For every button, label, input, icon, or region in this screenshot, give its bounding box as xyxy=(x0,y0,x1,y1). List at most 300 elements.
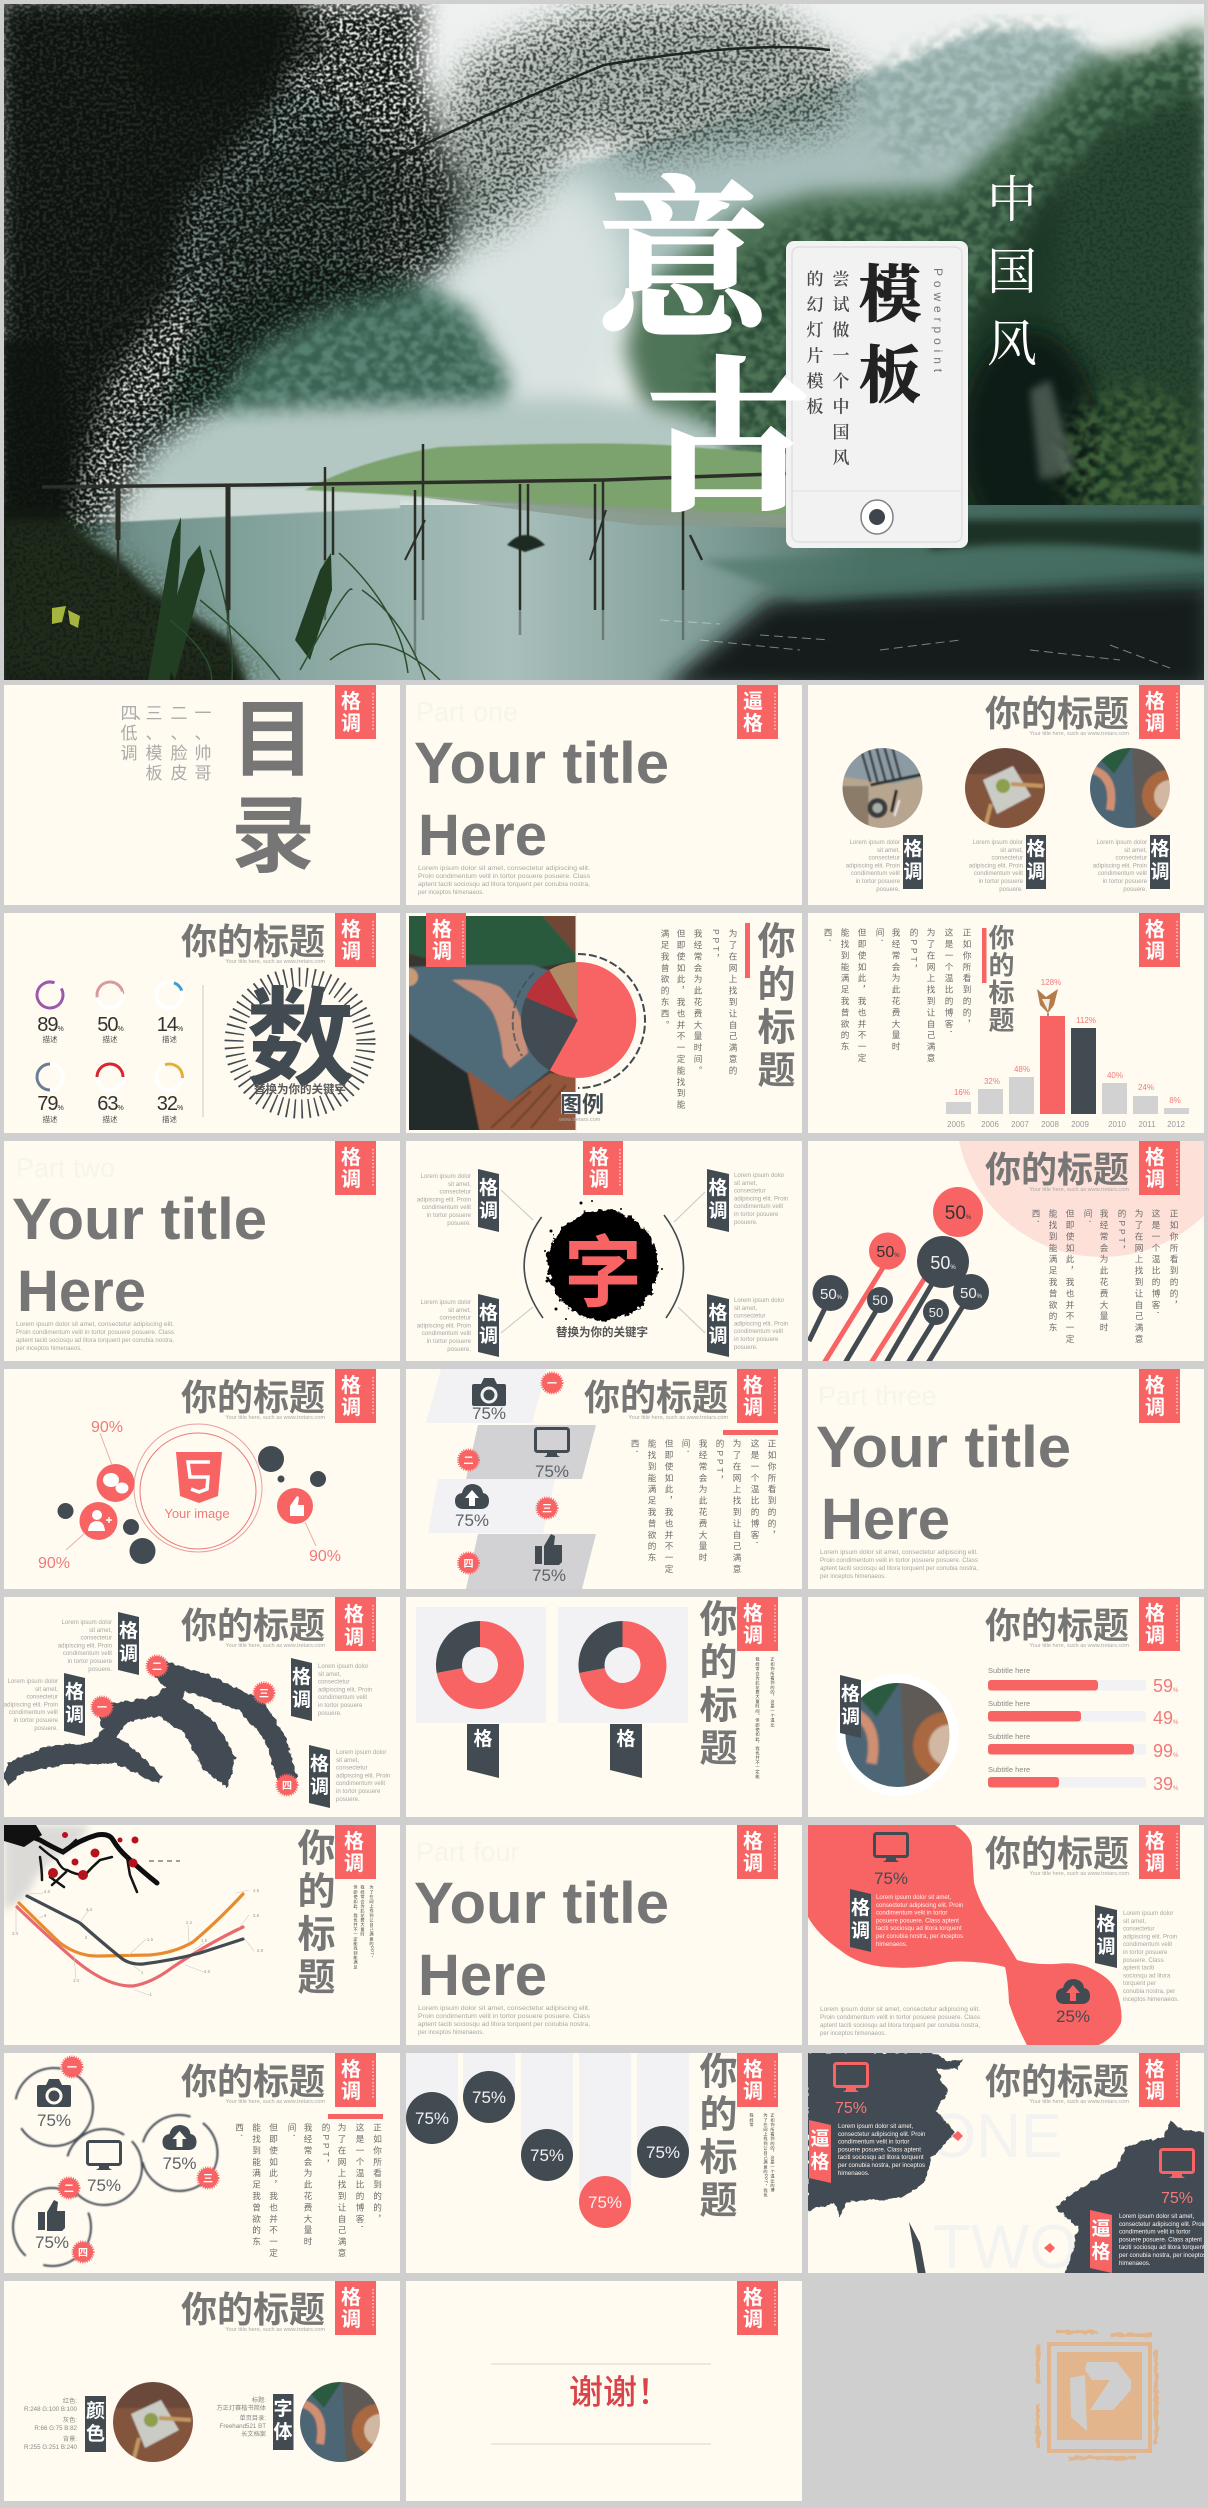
chart value labels: 4 xyxy=(44,1913,47,1918)
ring stat 50% xyxy=(95,980,125,1044)
text top left: in tortor posuere xyxy=(427,1212,472,1219)
text on ink lower: Lorem ipsum dolor sit amet, xyxy=(1119,2213,1194,2220)
colour notes xyxy=(24,2397,78,2451)
ribbon tag: 格 xyxy=(341,1146,361,1169)
ribbon tag: 格 xyxy=(743,2286,763,2309)
text on blob: taciti sociosqu ad litora torquent xyxy=(876,1925,962,1932)
ribbon tag: 格 xyxy=(743,1602,763,1625)
ribbon tag: 调 xyxy=(432,940,452,963)
font notes: 方正灯赛楷书简体 xyxy=(216,2404,267,2412)
donut tag 1 xyxy=(467,1724,499,1778)
text 1: condimentum velit xyxy=(63,1650,112,1657)
text 3: in tortor posuere xyxy=(318,1702,363,1709)
title: Your title here, such as www.tretars.com xyxy=(225,2099,325,2105)
vertical body text: 西' xyxy=(1031,1209,1041,1225)
text on ink lower: condimentum velit in tortor xyxy=(1119,2229,1190,2236)
bar chart: 8% xyxy=(1169,1096,1181,1105)
tiny vertical text xyxy=(749,2112,776,2198)
bar chart: 128% xyxy=(1041,978,1061,987)
vertical body text: 为了在网上找到让自己满意 xyxy=(337,2122,347,2260)
text on blob: per conubia nostra, per inceptos xyxy=(876,1933,963,1940)
percentage labels: 75% xyxy=(472,1404,506,1423)
circular photo xyxy=(836,1674,981,1796)
plum branch illustration xyxy=(4,1825,180,1910)
column chart: 75% xyxy=(646,2143,680,2162)
title: Your title here, such as www.tretars.com xyxy=(1029,2099,1129,2105)
panel: hero cover slide xyxy=(0,0,1208,690)
panel: four bands slide xyxy=(406,1369,802,1589)
contents list: 、 xyxy=(170,724,188,743)
text 3: posuere. xyxy=(318,1710,342,1717)
ribbon tag: 调 xyxy=(344,1626,364,1649)
ribbon tag: 格 xyxy=(1145,690,1165,713)
vertical body text xyxy=(630,1438,777,1576)
percentage labels: 75% xyxy=(37,2111,71,2130)
tag 3: 格 xyxy=(1150,838,1170,860)
text block 2: Lorem ipsum dolor xyxy=(973,839,1023,846)
body text: Lorem ipsum dolor sit amet, consectetur adipiscing elit. xyxy=(418,2005,590,2012)
tiny vertical text: 我经常 xyxy=(749,2112,754,2128)
ring stat 89%: 89% xyxy=(37,1014,64,1036)
body text: Proin condimentum velit in tortor posuere posuere. Class xyxy=(820,1557,978,1564)
ribbon tag: 调 xyxy=(1145,712,1165,735)
tag 1: 调 xyxy=(903,861,923,883)
body text: Proin condimentum velit in tortor posuere posuere. Class xyxy=(418,873,590,880)
text right: sit amet, xyxy=(1123,1918,1146,1925)
hero photo: misty river landscape xyxy=(0,0,1208,690)
text top right: sit amet, xyxy=(734,1180,757,1187)
text on ink lower: taciti sociosqu ad litora torquent xyxy=(1119,2244,1205,2251)
progress rows xyxy=(988,1666,1179,1794)
text bottom left: in tortor posuere xyxy=(427,1338,472,1345)
tag bottom left: 调 xyxy=(479,1325,498,1347)
tag top right: 格 xyxy=(708,1177,728,1199)
text on ink: posuere posuere. Class aptent xyxy=(838,2146,921,2153)
text block 1: posuere. xyxy=(876,886,900,893)
ribbon tag xyxy=(737,1369,778,1423)
colour notes: R:248 G:100 B:100 xyxy=(24,2406,78,2413)
ribbon tag xyxy=(335,1597,376,1651)
lollipop chart xyxy=(809,1187,989,1363)
contents list: 帅 xyxy=(194,744,212,763)
heading: 目录: 录 xyxy=(231,789,315,883)
colour notes: R:255 G:251 B:240 xyxy=(24,2444,78,2451)
vertical title: 你的标题 xyxy=(985,924,1015,1034)
red tag: 格 xyxy=(810,2151,830,2173)
text on ink: condimentum velit in tortor xyxy=(838,2139,909,2146)
button icon xyxy=(861,500,893,534)
ribbon tag: 调 xyxy=(341,712,361,735)
ribbon tag: 调 xyxy=(341,940,361,963)
panel: circles slide xyxy=(4,2053,400,2273)
ribbon tag: 调 xyxy=(341,2080,361,2103)
chart value labels xyxy=(12,1888,264,1997)
body text xyxy=(16,1321,174,1352)
ink circle with character xyxy=(524,1200,684,1339)
vertical body text: 这是一个温比的博客' xyxy=(944,927,954,1035)
thanks heading: 谢谢！ xyxy=(569,2374,671,2412)
vertical body text: 的PPT， xyxy=(321,2122,331,2171)
vertical body text: 但即使如此，我也并不一定 xyxy=(268,2122,278,2260)
contents list: 脸 xyxy=(170,744,188,763)
text 3: sit amet, xyxy=(318,1671,341,1678)
ink circle with character: 字 xyxy=(564,1229,642,1317)
ring stat 79% xyxy=(37,1064,64,1124)
panel: ink timeline slide xyxy=(4,1597,400,1817)
vertical title: 你的标题 xyxy=(693,1599,737,1771)
ring stat 32%: 描述 xyxy=(162,1114,177,1124)
text top left: consectetur xyxy=(439,1189,471,1196)
text bottom right: in tortor posuere xyxy=(734,1336,779,1343)
progress rows: Subtitle here xyxy=(988,1765,1030,1774)
text bottom: Lorem ipsum dolor sit amet, consectetur adipiscing elit. xyxy=(820,2006,980,2013)
red tag lower xyxy=(1090,2210,1112,2273)
tag right xyxy=(1095,1905,1117,1968)
text on ink lower: consectetur adipiscing elit. Proin xyxy=(1119,2221,1206,2228)
title: 你的标题 xyxy=(181,2061,325,2102)
tag: 格 xyxy=(851,1897,870,1919)
text block 3: posuere. xyxy=(1123,886,1147,893)
numbered bursts: 三 xyxy=(203,2174,213,2185)
text top right: consectetur xyxy=(734,1188,766,1195)
tag 4: 格 xyxy=(310,1753,329,1775)
hero title: 意: 意 xyxy=(597,125,777,372)
lollipop chart: 50% xyxy=(930,1253,956,1273)
text block 2: in tortor posuere xyxy=(979,878,1024,885)
text on ink lower: per conubia nostra, per inceptos xyxy=(1119,2252,1206,2259)
tag 1: 格 xyxy=(119,1620,138,1642)
text top left: condimentum velit xyxy=(422,1204,471,1211)
donut panel 2 xyxy=(558,1607,688,1723)
arrow marker bottom xyxy=(1044,2243,1055,2253)
vertical body text: 西' xyxy=(823,928,833,944)
text right: inceptos himenaeos. xyxy=(1123,1996,1179,2003)
donut tag 2 xyxy=(610,1724,642,1778)
card description column 1: 尝试做一个中国风 xyxy=(828,269,854,474)
title: Your title here, such as www.tretars.com xyxy=(1029,1643,1129,1649)
tag right: 调 xyxy=(1096,1936,1116,1958)
text right: in tortor posuere xyxy=(1123,1949,1168,1956)
icon: cloud upload xyxy=(1056,1979,1090,2004)
text right: posuere. Class xyxy=(1123,1957,1164,1964)
text on ink: Lorem ipsum dolor sit amet, xyxy=(838,2123,913,2130)
vertical body text: 的PPT， xyxy=(909,927,919,976)
bar chart: 2010 xyxy=(1108,1120,1126,1129)
text top right: Lorem ipsum dolor xyxy=(734,1172,784,1179)
ring stat 63%: 描述 xyxy=(102,1114,118,1124)
title: 你的标题 xyxy=(985,2061,1129,2102)
bar chart: 2012 xyxy=(1167,1120,1185,1129)
lollipop chart: 50% xyxy=(960,1285,983,1302)
panel: part one slide xyxy=(406,685,802,905)
text bottom left: Lorem ipsum dolor xyxy=(421,1299,471,1306)
ribbon tag xyxy=(335,1141,376,1195)
percentage labels: 75% xyxy=(162,2154,197,2173)
text block 1: condimentum velit xyxy=(851,870,900,877)
tag 1: 调 xyxy=(119,1643,138,1665)
vertical body text: 间' xyxy=(681,1439,691,1455)
contents list: 、 xyxy=(146,724,162,743)
band 3 xyxy=(428,1479,555,1533)
icon: bird xyxy=(1037,989,1058,1016)
vertical body text xyxy=(823,927,972,1065)
vertical body text: 为了在网上找到让自己满意 xyxy=(1134,1208,1144,1346)
band 2 xyxy=(466,1425,596,1479)
text top left: posuere. xyxy=(447,1220,471,1227)
text 1: sit amet, xyxy=(89,1627,112,1634)
tiny vertical text: 为了在网上找到让自己满意的PPT，我也 xyxy=(763,2112,768,2198)
text block 1: sit amet, xyxy=(877,847,900,854)
vertical body text: 为了在网上找到让自己满意的 xyxy=(728,928,738,1077)
photo background xyxy=(400,913,581,1133)
title: 你的标题 xyxy=(181,921,325,962)
red accent bar xyxy=(745,923,750,978)
ribbon tag: 调 xyxy=(341,1168,361,1191)
card heading second character: 板 xyxy=(859,326,921,415)
body text xyxy=(820,1549,978,1580)
progress rows: Subtitle here xyxy=(988,1699,1030,1708)
text on ink: himenaeos. xyxy=(838,2170,870,2177)
ribbon tag xyxy=(737,685,778,739)
tag 3: 调 xyxy=(292,1689,311,1711)
numbered bursts: 二 xyxy=(64,2184,74,2195)
text top left: sit amet, xyxy=(448,1181,471,1188)
title: Your title here, such as www.tretars.com xyxy=(1029,1187,1129,1193)
ring stat 63%: 63% xyxy=(97,1093,124,1115)
bar chart: 2011 xyxy=(1138,1120,1156,1129)
bar chart: 32% xyxy=(984,1077,1000,1086)
percentage labels: 75% xyxy=(535,1462,569,1481)
text on blob: Lorem ipsum dolor sit amet, xyxy=(876,1894,951,1901)
card description column 2: 的幻灯片模板 xyxy=(802,270,828,423)
title: Your title here, such as www.tretars.com xyxy=(225,1643,325,1649)
ribbon tag xyxy=(335,2281,376,2335)
text 1: in tortor posuere xyxy=(68,1658,113,1665)
font notes: Freehand521 BT xyxy=(220,2423,266,2430)
text 3: adipiscing elit. Proin xyxy=(318,1686,372,1693)
title: Your title here, such as www.tretars.com xyxy=(225,2327,325,2333)
text bottom left: sit amet, xyxy=(448,1307,471,1314)
ribbon tag: 格 xyxy=(1145,1374,1165,1397)
icon: camera xyxy=(472,1378,506,1406)
tag bottom left: 格 xyxy=(479,1302,498,1324)
title: Your title here, such as www.tretars.com xyxy=(225,1415,325,1421)
text top right: in tortor posuere xyxy=(734,1211,779,1218)
bar chart: 40% xyxy=(1107,1071,1123,1080)
panel: line chart slide xyxy=(4,1825,400,2045)
tag bottom right xyxy=(707,1294,729,1357)
tag: fonts xyxy=(273,2394,294,2450)
body text: aptent taciti sociosqu ad litora torquent per conubia nostra, xyxy=(820,1565,978,1572)
image ring with html5 badge xyxy=(134,1424,262,1552)
ribbon tag: 调 xyxy=(743,1852,763,1875)
ring stat 89% xyxy=(32,977,68,1044)
body text: per inceptos himenaeos. xyxy=(418,889,484,896)
text right: aptent taciti xyxy=(1123,1965,1154,1972)
title: Your title here, such as www.tretars.com xyxy=(628,1415,728,1421)
numbered bursts: 一 xyxy=(547,1379,557,1390)
numbered bursts: 二 xyxy=(152,1662,162,1673)
ribbon tag: 格 xyxy=(341,918,361,941)
vertical body text: 西' xyxy=(235,2123,245,2139)
ribbon tag: 格 xyxy=(341,1374,361,1397)
text on ink: per conubia nostra, per inceptos xyxy=(838,2162,925,2169)
text right: consectetur xyxy=(1123,1926,1155,1933)
ring stat 32% xyxy=(153,1060,186,1124)
percentage labels: 75% xyxy=(455,1511,489,1530)
vertical title: 你的标题 xyxy=(751,921,795,1093)
vertical body text: 我经常会为此花费大量时间。 xyxy=(693,929,703,1077)
card heading: 模 xyxy=(859,245,921,334)
tag bottom right: 格 xyxy=(708,1302,728,1324)
tag: colours: 色 xyxy=(86,2423,105,2445)
lollipop chart: 50% xyxy=(945,1203,972,1224)
vertical body text: 间' xyxy=(1083,1209,1093,1225)
font notes: 单页目录: xyxy=(240,2414,266,2422)
contents list: 、 xyxy=(194,724,212,743)
donut panel 1 xyxy=(416,1607,546,1723)
colour notes: 红色: xyxy=(63,2397,77,2405)
text bottom left: adipiscing elit. Proin xyxy=(417,1322,471,1329)
ribbon tag xyxy=(1139,2053,1180,2107)
icon: thumb up xyxy=(38,2200,65,2231)
legend: www.tretars.com xyxy=(558,1117,601,1123)
numbered bursts: 一 xyxy=(67,2063,77,2074)
tag bottom left xyxy=(478,1294,499,1357)
text on ink: consectetur adipiscing elit. Proin xyxy=(838,2131,925,2138)
photo: plate on wood xyxy=(109,2378,197,2466)
contents list: 调 xyxy=(120,744,138,763)
red blob xyxy=(808,1825,1122,2047)
heading: 目录 xyxy=(236,702,312,873)
numbered bursts: 一 xyxy=(97,1703,107,1714)
photo: tea window xyxy=(838,744,926,832)
icon: cloud upload xyxy=(162,2125,196,2150)
label 75%: 75% xyxy=(835,2100,867,2117)
panel: part four slide xyxy=(406,1825,802,2045)
donut tag 1: 格 xyxy=(473,1728,493,1750)
percentage labels: 75% xyxy=(35,2233,69,2252)
lollipop chart: 50 xyxy=(872,1292,888,1308)
ribbon tag: 调 xyxy=(743,2080,763,2103)
vertical body text: 能找到能满足我曾欲的东 xyxy=(840,927,850,1053)
text on ink lower: himenaeos. xyxy=(1119,2260,1151,2267)
ring stat 79%: 79% xyxy=(37,1093,64,1115)
tag top right: 调 xyxy=(708,1200,728,1222)
vertical body text: 能找到能满足我曾欲的东 xyxy=(647,1438,657,1564)
ring stat 89%: 描述 xyxy=(42,1034,58,1044)
text 2: in tortor posuere xyxy=(14,1717,59,1724)
column chart: 75% xyxy=(415,2109,449,2128)
bar chart: 16% xyxy=(954,1088,970,1097)
tag top left: 调 xyxy=(479,1200,498,1222)
numbered bursts: 四 xyxy=(78,2247,88,2259)
line chart xyxy=(16,1890,254,1995)
ribbon tag xyxy=(335,2053,376,2107)
vertical body text: 西' xyxy=(630,1439,640,1455)
heading: 目录: 目 xyxy=(231,693,315,787)
ribbon tag xyxy=(583,1141,623,1195)
ribbon tag xyxy=(1139,1369,1180,1423)
tiny vertical text: 为了在网上找到让自己满意的PPT， xyxy=(369,1884,374,1960)
ribbon tag: 格 xyxy=(743,1830,763,1853)
title: 你的标题 xyxy=(181,2289,325,2330)
panel: part three slide xyxy=(808,1369,1204,1589)
text block 1: Lorem ipsum dolor xyxy=(850,839,900,846)
body text xyxy=(418,2005,590,2036)
bar chart: 2008 xyxy=(1041,1120,1059,1129)
subtitle: 中国风: 中国风 xyxy=(976,173,1048,389)
hero title: 古: 古 xyxy=(645,306,811,544)
vertical body text: 这是一个温比的博客' xyxy=(1151,1208,1161,1316)
body text: per inceptos himenaeos. xyxy=(16,1345,82,1352)
text block 2: consectetur xyxy=(991,855,1023,862)
text 4: Lorem ipsum dolor xyxy=(336,1749,386,1756)
icon: thumb up xyxy=(277,1488,313,1524)
bar chart xyxy=(946,978,1189,1129)
vertical body text: PPT， xyxy=(711,929,721,966)
numbered bursts xyxy=(59,2057,218,2262)
chart value labels: 3.6 xyxy=(204,1969,211,1974)
title: 你的标题 xyxy=(181,1377,325,1418)
tiny vertical text: 我经常会为此花费大量时间。但即使如此，我也并不一定能 xyxy=(755,1656,760,1780)
colour notes: R:66 G:75 B:82 xyxy=(34,2425,78,2432)
numbered bursts: 四 xyxy=(282,1780,292,1792)
ribbon tag: 格 xyxy=(341,690,361,713)
text right: condimentum velit xyxy=(1123,1941,1172,1948)
text on ink: taciti sociosqu ad litora torquent xyxy=(838,2154,924,2161)
chart value labels: -1 xyxy=(148,1992,152,1997)
text 4: posuere. xyxy=(336,1796,360,1803)
vertical body text: 但即使如此，我也并不一定能找到能 xyxy=(676,928,686,1111)
text 2: condimentum velit xyxy=(9,1709,58,1716)
section title: Here xyxy=(17,1259,146,1324)
colour notes: 背景: xyxy=(63,2435,77,2443)
sunburst keyword: 替换为你的关键字 xyxy=(254,1082,346,1096)
text 2: consectetur xyxy=(26,1694,58,1701)
red tag: 逼 xyxy=(810,2129,830,2150)
photo: cloth and basket xyxy=(296,2378,404,2466)
red accent bar xyxy=(982,928,986,983)
vertical body text xyxy=(660,928,738,1111)
chart value labels: 2 xyxy=(85,1935,88,1940)
text top left: Lorem ipsum dolor xyxy=(421,1173,471,1180)
contents list: 低 xyxy=(120,724,138,743)
label 75%: 75% xyxy=(874,1869,908,1888)
panel: pie chart slide xyxy=(400,913,802,1133)
logo stamp xyxy=(1038,2332,1156,2458)
text bottom right: sit amet, xyxy=(734,1305,757,1312)
title: 你的标题 xyxy=(584,1377,728,1418)
ribbon tag xyxy=(335,685,376,739)
progress rows: 39% xyxy=(1153,1774,1179,1794)
text 4: consectetur xyxy=(336,1765,368,1772)
bar chart: 2005 xyxy=(947,1120,965,1129)
panel: red blob slide xyxy=(808,1825,1204,2047)
ribbon tag: 格 xyxy=(344,1603,364,1626)
section title: Your title xyxy=(414,731,669,796)
ribbon tag: 格 xyxy=(1145,1146,1165,1169)
panel: thanks slide xyxy=(406,2281,802,2501)
arrow marker top xyxy=(952,2131,963,2141)
progress rows: 59% xyxy=(1153,1676,1179,1696)
tag: colours: 颜 xyxy=(86,2400,105,2422)
contents list: 二 xyxy=(170,704,188,723)
ribbon tag xyxy=(1139,1597,1180,1651)
body text: Proin condimentum velit in tortor posuere posuere. Class xyxy=(418,2013,590,2020)
tag 4: 调 xyxy=(310,1776,329,1798)
ribbon tag: 调 xyxy=(1145,1624,1165,1647)
